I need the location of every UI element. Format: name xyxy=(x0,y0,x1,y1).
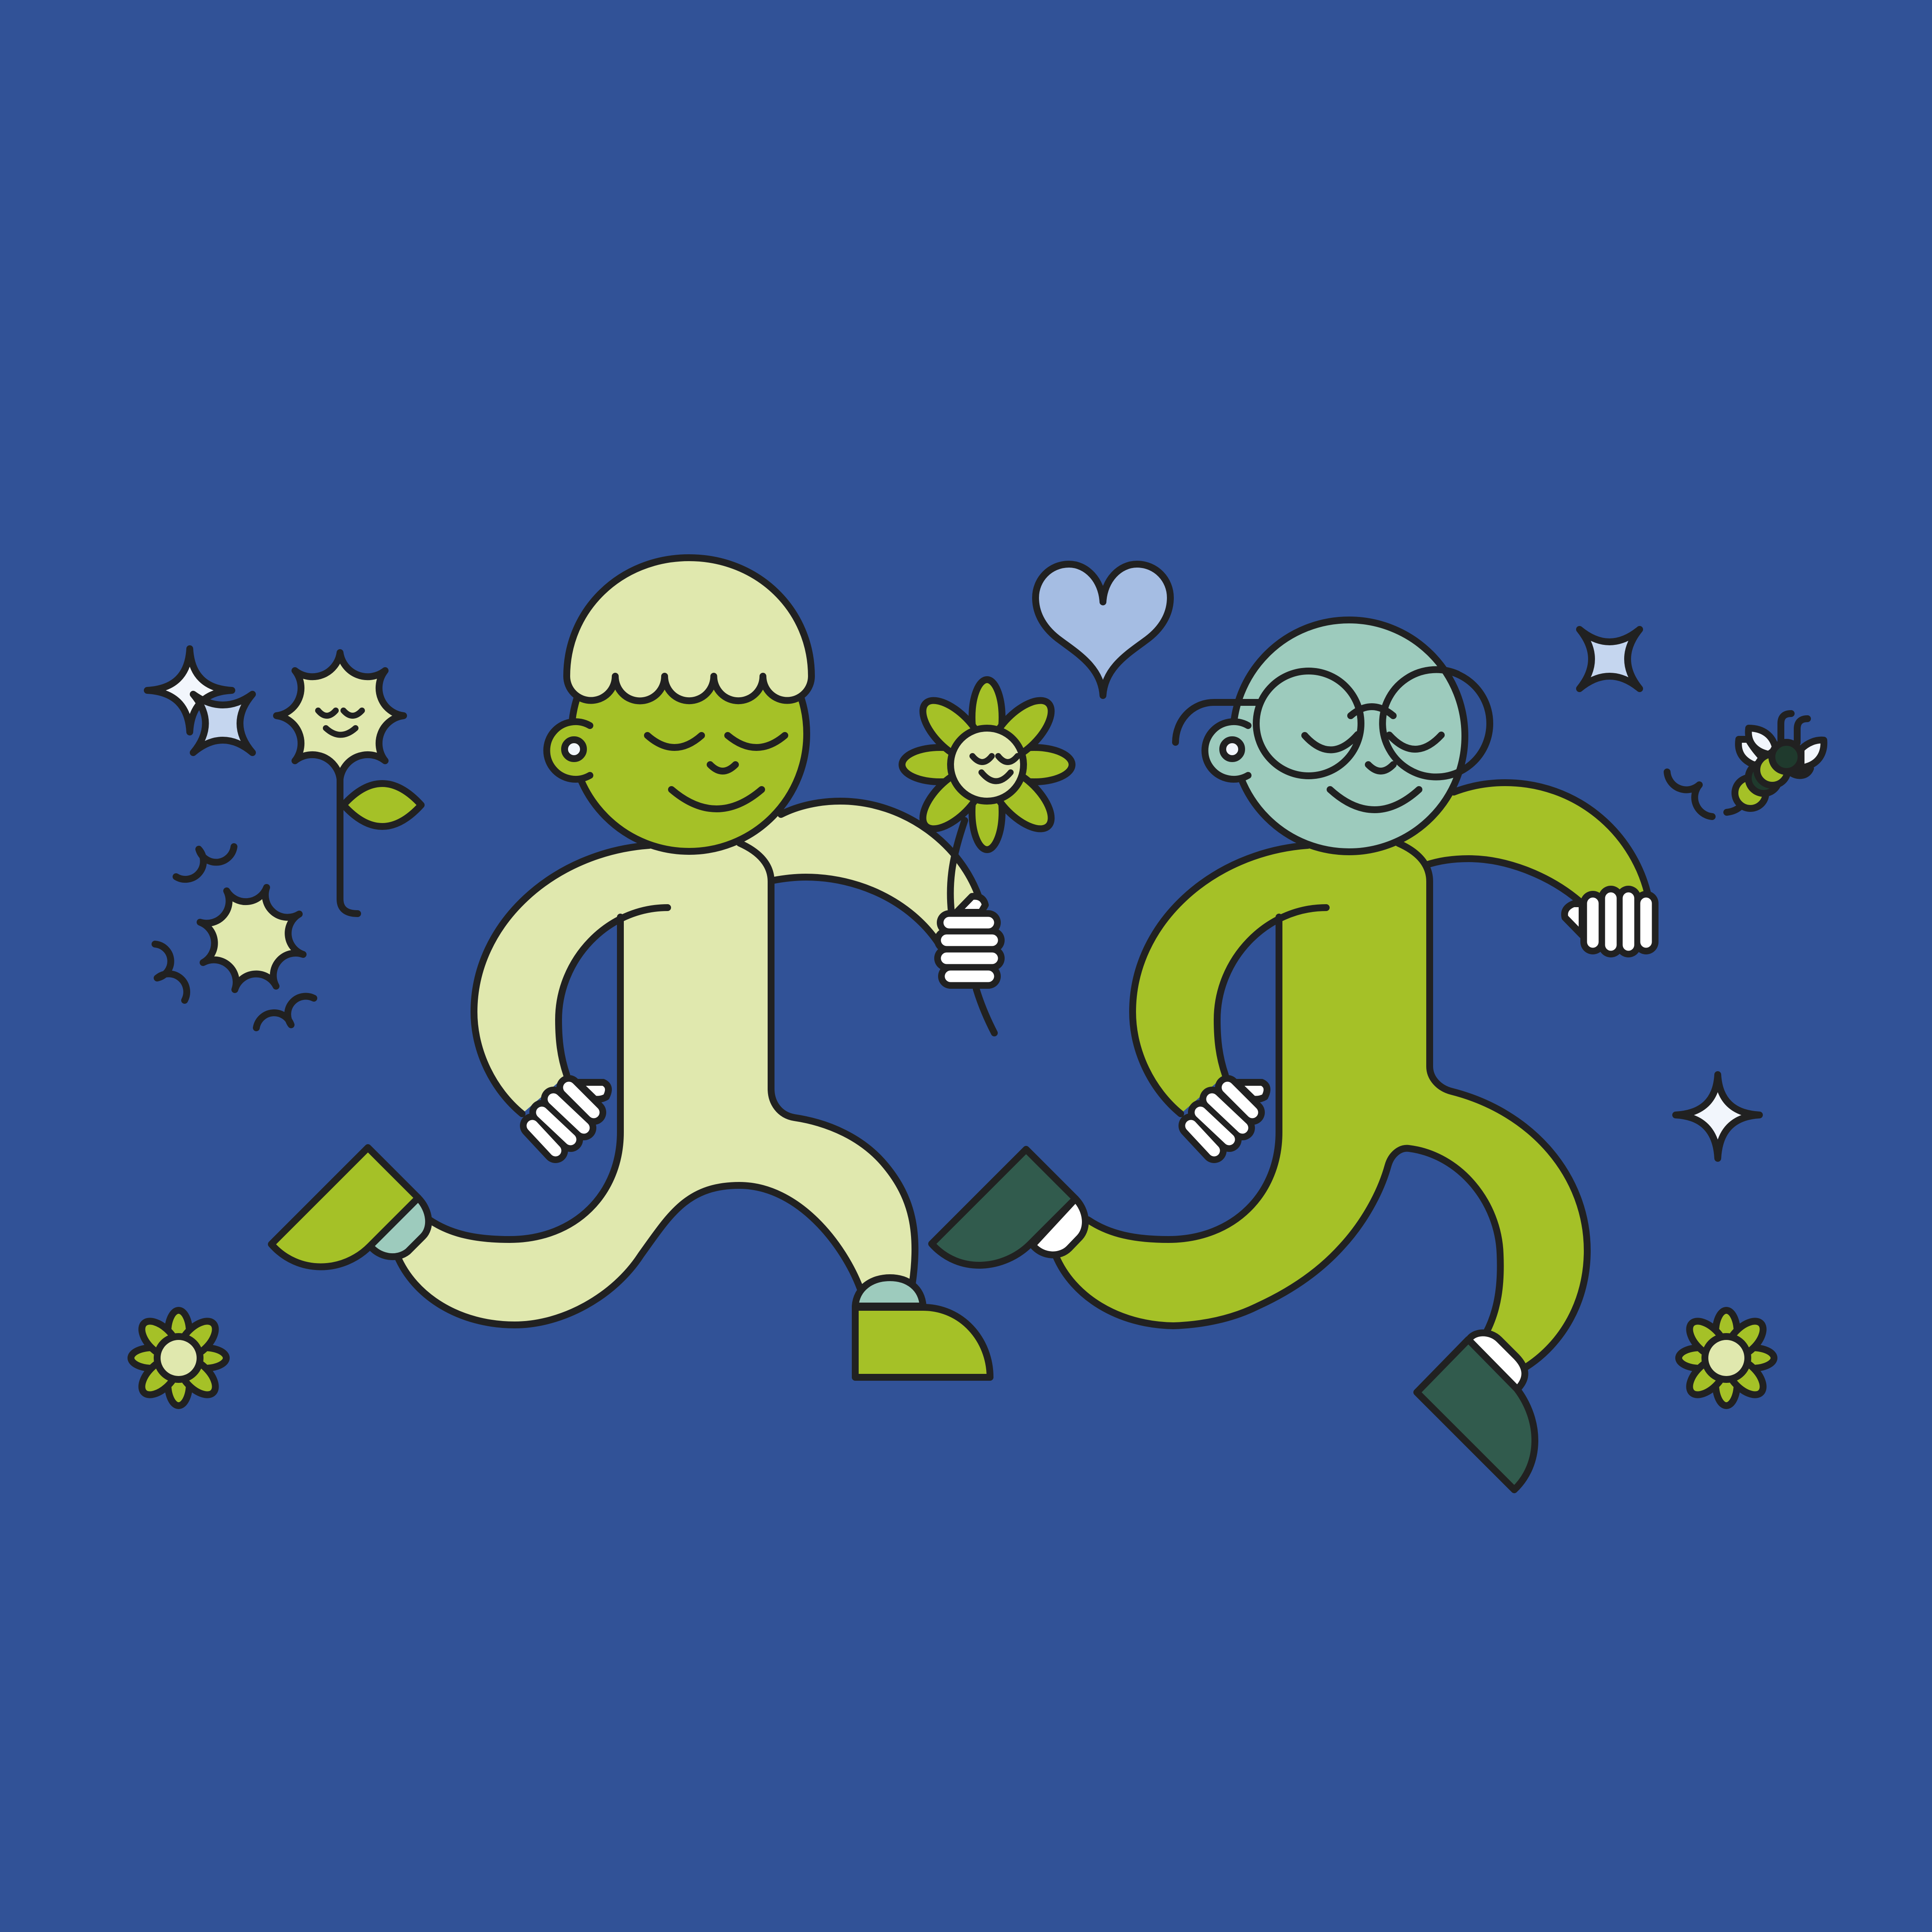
icon: small flower bottom right xyxy=(1679,1310,1774,1406)
icon: small flower bottom left xyxy=(131,1310,226,1406)
right runner glasses back lens xyxy=(1382,670,1490,777)
bee flight trail xyxy=(1667,772,1740,817)
left runner face xyxy=(647,735,785,809)
icon: blue sparkle top left xyxy=(193,694,252,753)
left runner front arm outline xyxy=(772,801,980,943)
left runner front arm xyxy=(730,801,980,943)
icon: heart xyxy=(1036,564,1170,696)
left runner back foot ankle xyxy=(370,1198,428,1257)
left runner back shoe xyxy=(271,1148,418,1267)
icon: blue sparkle top right xyxy=(1580,629,1640,689)
right runner front arm outline xyxy=(1426,783,1647,902)
right runner front hand xyxy=(1564,898,1646,945)
character: left runner xyxy=(271,558,1072,1377)
right runner glasses xyxy=(1176,670,1461,777)
character: right runner xyxy=(932,620,1647,1490)
right runner back hand xyxy=(1191,1082,1267,1151)
icon: white sparkle top left xyxy=(147,649,232,732)
motion marks left xyxy=(155,847,314,1028)
right runner front shoe xyxy=(1417,1340,1535,1490)
flower stem xyxy=(951,820,994,1033)
right runner face xyxy=(1305,735,1441,810)
icon: white sparkle right xyxy=(1676,1075,1759,1158)
left runner body outline xyxy=(397,843,915,1325)
icon: smiling sun flower xyxy=(276,653,421,914)
right runner front ankle xyxy=(1468,1333,1525,1390)
right runner back ankle xyxy=(1033,1199,1085,1255)
right runner head xyxy=(1233,620,1465,852)
left runner back hand xyxy=(532,1082,608,1151)
left runner hair xyxy=(567,558,811,701)
left runner body xyxy=(397,843,915,1325)
left runner head xyxy=(571,616,807,851)
icon: small sun burst xyxy=(200,887,303,990)
left runner ear xyxy=(547,722,601,779)
right runner body xyxy=(1056,843,1587,1367)
right runner ear xyxy=(1205,722,1260,779)
right runner front arm xyxy=(1395,783,1647,902)
right runner back shoe xyxy=(932,1149,1075,1265)
left runner front ankle xyxy=(855,1278,923,1306)
left runner front shoe xyxy=(855,1307,990,1377)
held flower xyxy=(902,680,1072,850)
right runner body outline xyxy=(1056,843,1587,1367)
icon: bee xyxy=(1735,714,1824,808)
left runner front hand xyxy=(947,896,992,976)
